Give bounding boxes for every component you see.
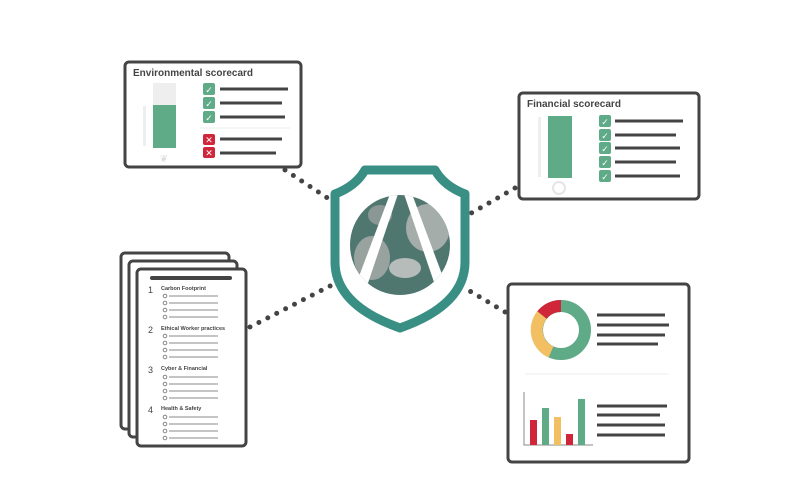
checklist: ✓ <box>601 131 609 141</box>
connector: environmental to shield <box>285 170 335 203</box>
connector: documents to shield <box>250 285 332 327</box>
donut chart <box>537 306 585 354</box>
checklist: ✓ <box>601 158 609 168</box>
section 1: 1 <box>148 285 153 295</box>
checklist: ✓ <box>601 117 609 127</box>
section 1: Carbon Footprint <box>161 286 206 292</box>
checklist: ✓ <box>601 172 609 182</box>
checklist: ✓ <box>205 113 213 123</box>
checklist: ✓ <box>601 144 609 154</box>
icon: shield with globe logo <box>335 170 465 328</box>
heading: financial: Financial scorecard <box>527 99 621 110</box>
section 1 <box>148 285 218 319</box>
connector: financial to shield <box>468 188 515 215</box>
checklist <box>200 83 290 158</box>
section 4: 4 <box>148 405 153 415</box>
heading: environmental: Environmental scorecard <box>133 68 253 79</box>
section 2 <box>148 325 225 359</box>
checklist: ✕ <box>205 135 213 145</box>
bar gauge <box>143 83 176 165</box>
panel: analytics report <box>508 284 689 462</box>
bar chart <box>524 392 593 445</box>
bar gauge: ❦ <box>160 154 168 165</box>
panel: environmental scorecard <box>125 62 301 167</box>
panel: financial scorecard <box>519 93 699 199</box>
section 3 <box>148 365 218 400</box>
bar gauge <box>538 116 572 194</box>
section 3: 3 <box>148 365 153 375</box>
checklist: ✓ <box>205 99 213 109</box>
panel: questionnaire document stack <box>121 253 246 446</box>
section 4 <box>148 405 218 440</box>
section 3: Cyber & Financial <box>161 366 208 372</box>
donut text lines <box>597 315 669 344</box>
section 4: Health & Safety <box>161 406 202 412</box>
connector: report to shield <box>468 290 505 312</box>
section 2: Ethical Worker practices <box>161 326 225 332</box>
checklist: ✕ <box>205 148 213 158</box>
section 2: 2 <box>148 325 153 335</box>
bar text lines <box>597 406 667 435</box>
checklist <box>599 115 683 182</box>
checklist: ✓ <box>205 85 213 95</box>
